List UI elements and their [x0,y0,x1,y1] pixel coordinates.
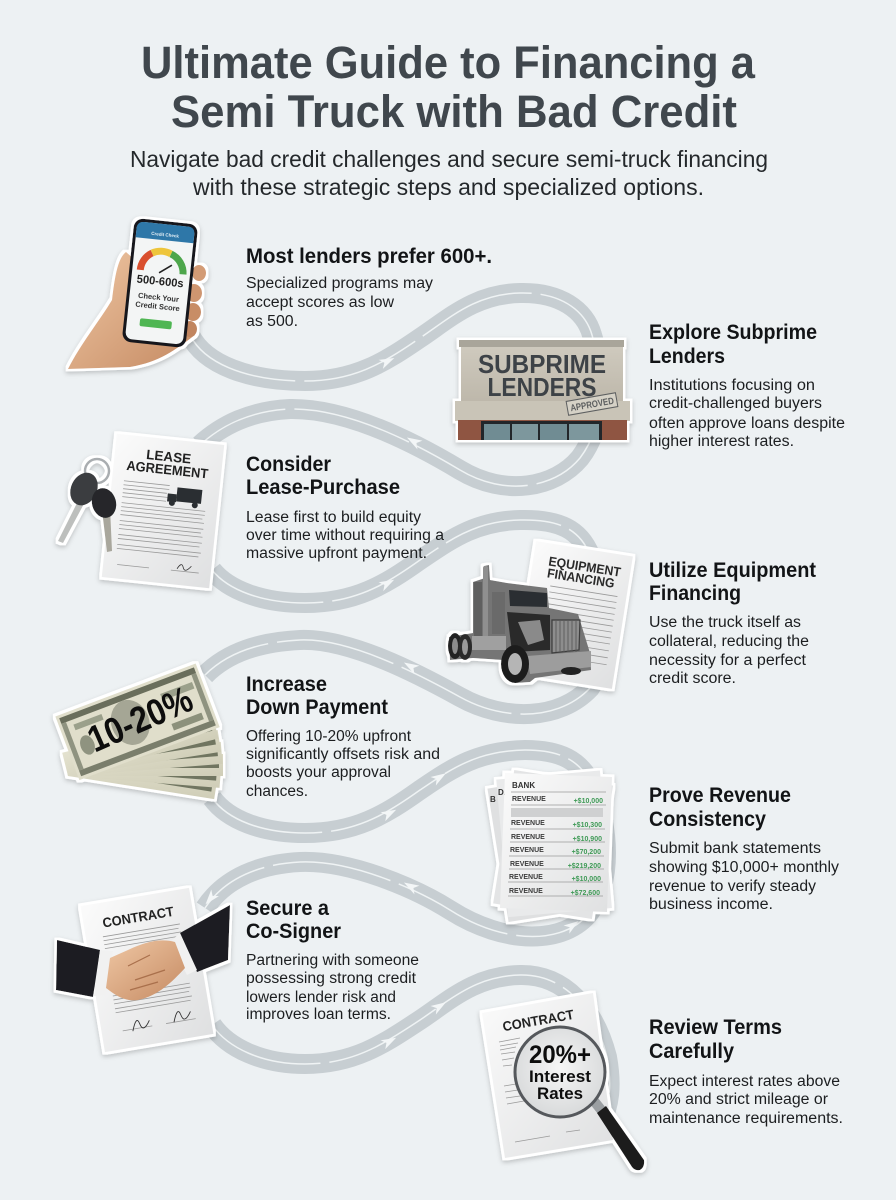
text block: chances. [246,783,308,800]
panel: review terms [482,993,843,1170]
icon: stack of bank statements: REVENUE [511,820,545,827]
icon: stack of bank statements: +$10,000 [574,798,603,805]
icon: semi truck and financing document: EQUIPMENT [547,553,622,580]
icon: semi truck and financing document [448,541,633,689]
heading: Consider [246,453,331,476]
icon: stack of bank statements: +$70,200 [572,849,601,856]
heading: Lenders [649,345,725,368]
icon: keys and lease agreement: AGREEMENT [126,458,210,482]
heading [246,673,388,719]
panel: co-signer [56,888,419,1052]
icon: contract with magnifying glass: Rates [537,1084,583,1103]
title: Semi Truck with Bad Credit [171,86,737,137]
text block: higher interest rates. [649,433,794,450]
icon: subprime lenders storefront: SUBPRIME [478,349,606,379]
heading [649,559,816,605]
title: Ultimate Guide to Financing a [141,37,756,88]
icon: stack of bank statements: B [490,795,496,804]
text block: credit-challenged buyers [649,395,822,412]
icon: keys and lease agreement [58,434,224,588]
text block [649,840,839,913]
icon: stack of bank statements: REVENUE [510,861,544,868]
panel: revenue consistency [487,770,839,922]
text block: collateral, reducing the [649,633,809,650]
icon: hand holding phone with credit gauge: Credit Check [151,231,180,239]
icon: stack of bank statements: REVENUE [509,888,543,895]
heading: Prove Revenue [649,784,791,807]
icon: hand holding phone with credit gauge: 500-600s [136,274,184,290]
subtitle: with these strategic steps and specialized options. [192,174,704,200]
heading: Explore Subprime [649,321,817,344]
text block: maintenance requirements. [649,1110,843,1127]
text block: massive upfront payment. [246,545,427,562]
icon: stack of bank statements: +$10,000 [572,876,601,883]
icon: contract with magnifying glass: 20%+ [529,1041,591,1069]
text block: improves loan terms. [246,1006,391,1023]
icon: hand holding phone with credit gauge [68,218,206,369]
icon: stack of bank statements: REVENUE [511,834,545,841]
icon: contract with magnifying glass [482,993,644,1170]
text block: as 500. [246,313,298,330]
icon: subprime lenders storefront [455,340,630,440]
heading [649,1016,782,1063]
heading: Most lenders prefer 600+. [246,245,492,268]
text block: over time without requiring a [246,527,444,544]
icon: stack of bank statements: REVENUE [512,796,546,803]
text block [246,952,419,1023]
text block: boosts your approval [246,764,391,781]
text block [246,728,440,800]
text block: lowers lender risk and [246,989,396,1006]
icon: contract and handshake [56,888,230,1052]
text block [649,614,809,687]
text block: often approve loans despite [649,415,845,432]
text block [246,275,433,330]
icon: fanned dollar bills with 10-20% [55,663,223,799]
heading: Co-Signer [246,920,341,943]
icon: contract and handshake: CONTRACT [101,904,176,931]
heading: Lease-Purchase [246,476,400,499]
heading [246,897,341,943]
text block: Use the truck itself as [649,614,801,631]
icon: stack of bank statements: +$219,200 [568,863,601,870]
icon: stack of bank statements: REVENUE [509,874,543,881]
heading: Secure a [246,897,329,920]
icon: subprime lenders storefront: APPROVED [570,396,615,414]
icon: semi truck and financing document: FINANCING [546,565,616,591]
text block: accept scores as low [246,294,395,311]
text block [649,1073,843,1127]
panel: lease-purchase [58,434,444,588]
text block: Expect interest rates above [649,1073,840,1090]
heading: Utilize Equipment [649,559,816,582]
icon: stack of bank statements: REVENUE [510,847,544,854]
icon: hand holding phone with credit gauge: Credit Score [135,300,180,313]
heading: Increase [246,673,327,696]
icon: contract with magnifying glass: Interest [529,1067,591,1086]
heading: Review Terms [649,1016,782,1039]
icon: hand holding phone with credit gauge: Check Your [138,291,179,304]
panel: subprime lenders [455,321,845,450]
winding road path [190,293,610,1125]
text block: showing $10,000+ monthly [649,859,839,876]
heading [649,784,791,831]
text block: possessing strong credit [246,970,417,987]
heading [246,453,400,499]
text block [649,377,845,450]
icon: stack of bank statements: DA [498,788,510,797]
panel: equipment financing [448,541,816,689]
text block: business income. [649,896,773,913]
icon: stack of bank statements: BANK [512,781,535,790]
icon: stack of bank statements [487,770,613,922]
text block: Partnering with someone [246,952,419,969]
text block: significantly offsets risk and [246,746,440,763]
text block: Specialized programs may [246,275,433,292]
heading: Down Payment [246,696,388,719]
icon: contract with magnifying glass: CONTRACT [501,1007,576,1034]
subtitle [130,146,768,200]
text block: credit score. [649,670,736,687]
panel: down payment [55,663,440,800]
heading: Financing [649,582,741,605]
text block: necessity for a perfect [649,652,807,669]
icon: subprime lenders storefront: LENDERS [488,372,596,402]
icon: stack of bank statements: +$72,600 [571,890,600,897]
text block: Submit bank statements [649,840,821,857]
heading [649,321,817,368]
subtitle: Navigate bad credit challenges and secure semi-truck financing [130,146,768,172]
title [141,37,756,137]
heading: Consistency [649,808,766,831]
text block: Offering 10-20% upfront [246,728,412,745]
icon: stack of bank statements: +$10,900 [573,836,602,843]
icon: stack of bank statements: +$10,300 [573,822,602,829]
heading: Carefully [649,1040,734,1063]
panel: check credit score [68,218,492,369]
text block: Lease first to build equity [246,509,421,526]
text block: revenue to verify steady [649,878,816,895]
icon: keys and lease agreement: LEASE [146,447,192,467]
text block [246,509,444,562]
icon: fanned dollar bills with 10-20%: 10-20% [82,678,199,760]
text block: Institutions focusing on [649,377,815,394]
text block: 20% and strict mileage or [649,1091,828,1108]
